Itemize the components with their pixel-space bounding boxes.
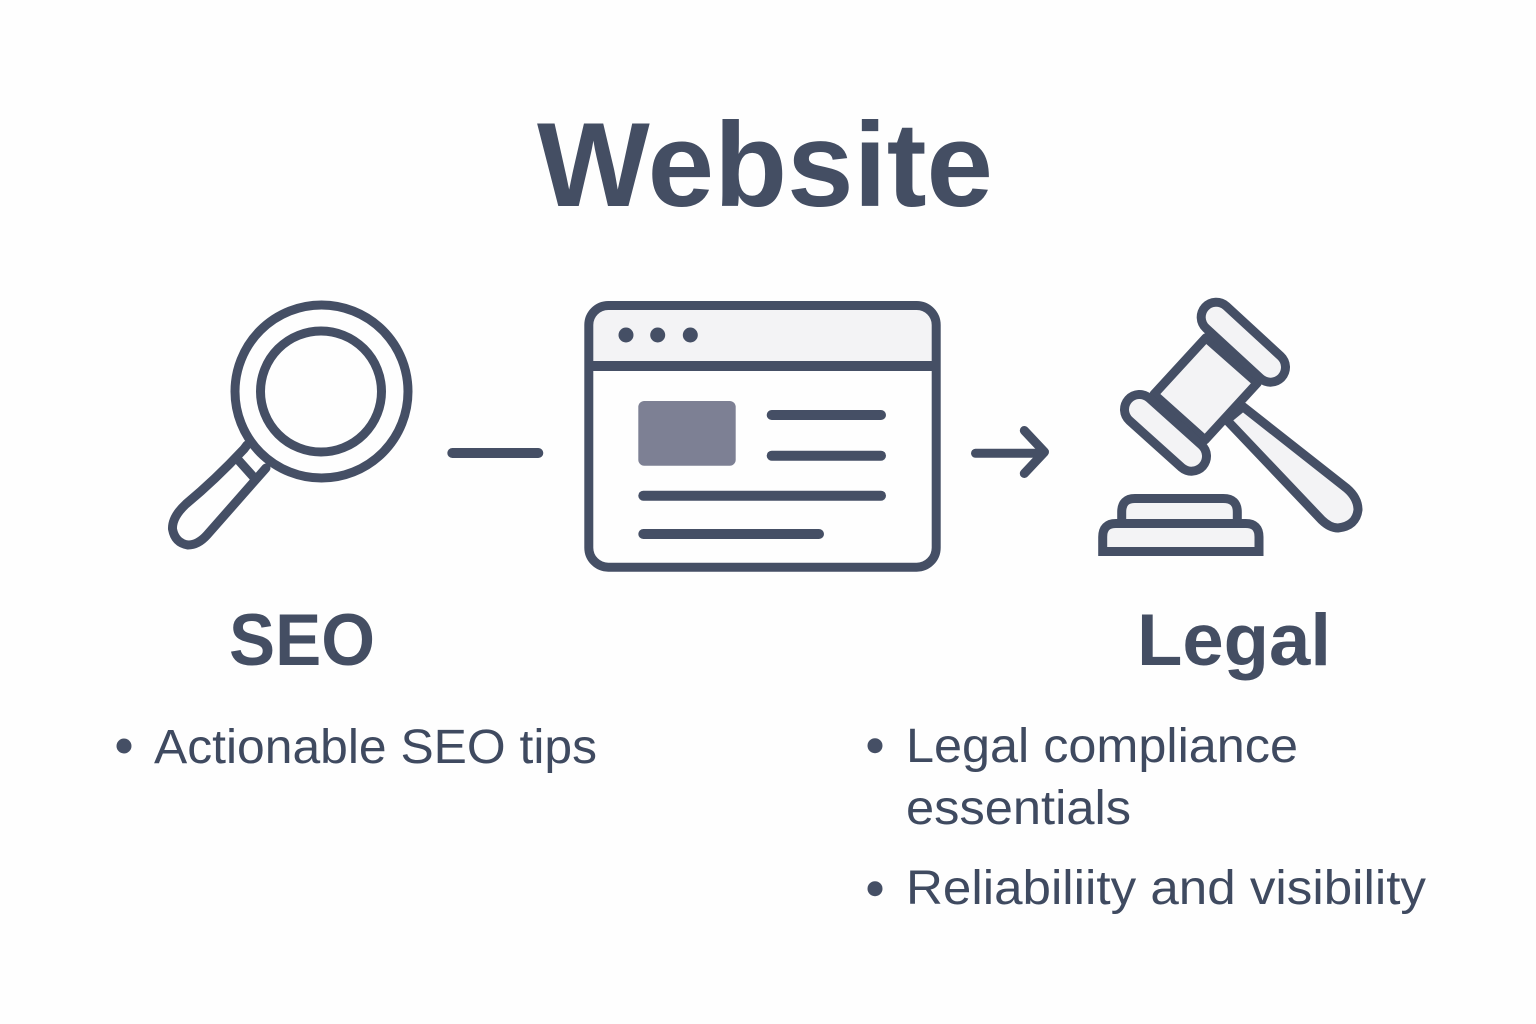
- gavel top cap: [1216, 317, 1270, 367]
- connector line: [447, 448, 543, 458]
- gavel bottom cap: [1140, 410, 1192, 456]
- bullet: legal compliance: [868, 720, 1298, 835]
- icon: browser window: [588, 306, 937, 567]
- title: Website: [537, 98, 993, 232]
- Legal bullet list: [868, 720, 1426, 915]
- browser frame: [589, 306, 936, 567]
- icon: gavel: [1103, 317, 1358, 552]
- gavel handle: [1227, 407, 1358, 528]
- arrow: [976, 430, 1044, 474]
- heading: Legal: Legal: [1137, 600, 1331, 681]
- browser header bar: [589, 306, 936, 366]
- header divider: [588, 361, 937, 371]
- window dots: [618, 328, 698, 342]
- bullet: reliability: Reliabiliity and visibility: [906, 862, 1426, 915]
- heading: SEO: SEO: [229, 600, 375, 681]
- bullet: legal compliance: Legal compliance: [906, 720, 1298, 773]
- text lines: [638, 410, 886, 539]
- SEO bullet list: Actionable SEO tips: [154, 721, 597, 774]
- icon: magnifying glass: [172, 305, 408, 545]
- image placeholder: [638, 401, 736, 466]
- gavel body: [1154, 338, 1257, 440]
- bullet: legal compliance: essentials: [906, 782, 1131, 835]
- sound block: [1103, 498, 1259, 552]
